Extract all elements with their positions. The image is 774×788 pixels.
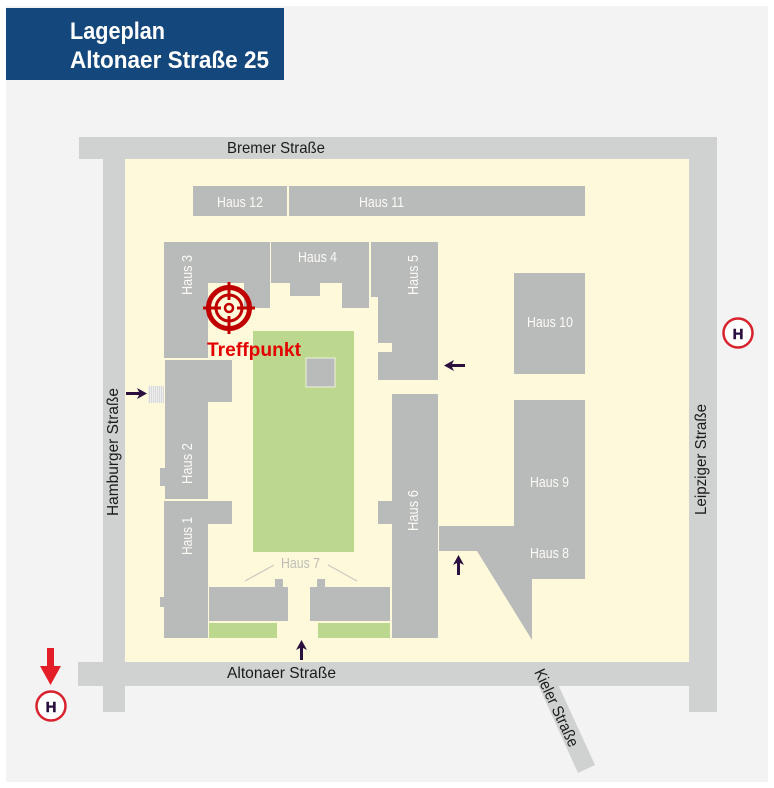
building: Haus 11: Haus 11 <box>359 195 404 211</box>
road: Bremer Straße <box>79 137 717 159</box>
building: Haus 2 <box>160 360 232 499</box>
building: Haus 3: Haus 3 <box>180 255 196 295</box>
stairs <box>148 386 164 403</box>
building: Haus 4: Haus 4 <box>298 250 337 266</box>
campus ground <box>125 159 689 662</box>
building: Haus 5: Haus 5 <box>406 255 422 295</box>
building: Haus 6 <box>378 394 438 638</box>
building: Haus 6: Haus 6 <box>406 490 422 531</box>
building: Haus 5 <box>371 242 438 380</box>
arrow: red arrow to bus stop <box>40 648 61 685</box>
road: Leipziger Straße: Leipziger Straße <box>693 404 710 515</box>
building: Haus 4 <box>271 242 369 308</box>
road: Kieler Straße: Kieler Straße <box>530 667 581 750</box>
road: Bremer Straße: Bremer Straße <box>227 140 325 157</box>
icon: bus stop right: H <box>733 326 743 343</box>
building: Haus 7 <box>209 556 390 621</box>
icon: bus stop right <box>724 318 752 348</box>
building: Haus 1 <box>160 501 232 638</box>
icon: bus stop left <box>36 692 66 720</box>
building: Haus 8 and Haus 9 <box>439 400 585 640</box>
road: Hamburger Straße <box>103 159 125 712</box>
road: Leipziger Straße <box>689 137 717 712</box>
building: Haus 2: Haus 2 <box>180 443 196 484</box>
courtyard building <box>306 358 335 387</box>
title banner <box>6 8 284 80</box>
building: Haus 12: Haus 12 <box>217 195 263 211</box>
title banner: Altonaer Straße 25 <box>70 47 269 74</box>
label: Treffpunkt: Treffpunkt <box>207 340 302 361</box>
arrow: entrance Haus 8 <box>453 555 464 575</box>
road: Hamburger Straße: Hamburger Straße <box>105 388 122 516</box>
building: Haus 1: Haus 1 <box>180 517 196 555</box>
green courtyard <box>253 331 354 552</box>
green strip right <box>318 623 390 638</box>
building: Haus 10: Haus 10 <box>527 315 573 331</box>
arrow: main entrance Altonaer Straße <box>296 640 307 660</box>
building: Haus 10 <box>514 273 585 374</box>
building: Haus 12 <box>193 186 287 216</box>
arrow: entrance from Hamburger Straße <box>126 388 147 399</box>
building: Haus 8 and Haus 9: Haus 8 <box>530 546 569 562</box>
building: Haus 3 <box>164 242 270 358</box>
building: Haus 11 <box>289 186 585 216</box>
road: Altonaer Straße: Altonaer Straße <box>227 665 336 682</box>
arrow: entrance Haus 5 <box>444 360 465 371</box>
road: Altonaer Straße <box>78 662 717 686</box>
icon: meeting point target <box>203 282 255 334</box>
green strip left <box>209 623 277 638</box>
building: Haus 8 and Haus 9: Haus 9 <box>530 475 569 491</box>
building: Haus 7: Haus 7 <box>281 556 320 572</box>
icon: bus stop left: H <box>46 699 56 716</box>
title banner: Lageplan <box>70 18 165 45</box>
